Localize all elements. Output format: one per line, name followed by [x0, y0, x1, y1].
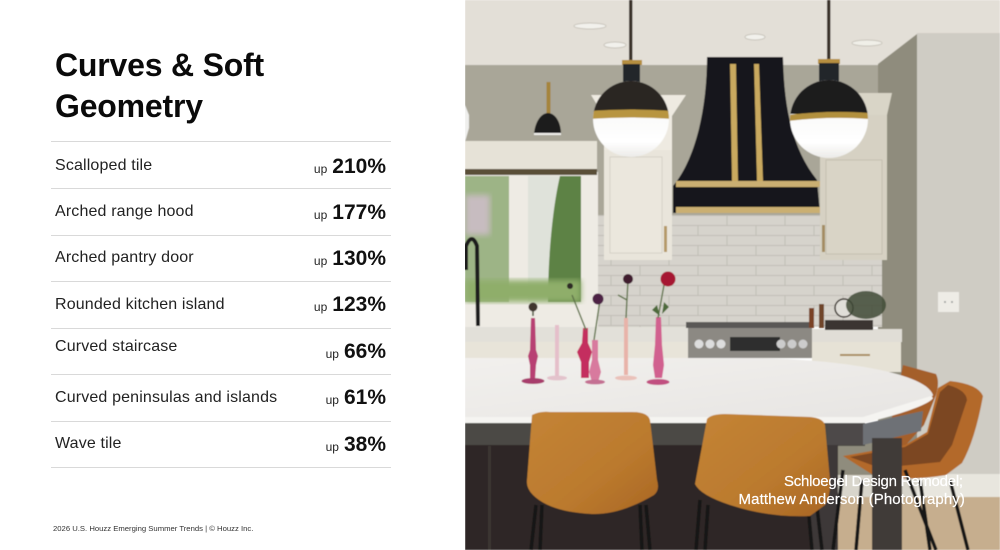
wall and skirting behind stools — [830, 430, 920, 498]
row: arched pantry door: Arched pantry door — [55, 249, 194, 266]
near right chair — [843, 381, 983, 478]
far chair — [885, 365, 938, 450]
title: Geometry — [55, 88, 203, 124]
photo credit: Schloegel Design Remodel; — [784, 473, 963, 490]
stool center — [695, 414, 830, 516]
row: scalloped tile: Scalloped tile — [55, 157, 152, 174]
side wall — [878, 34, 917, 480]
title — [55, 47, 264, 124]
pendant lamp left — [590, 0, 672, 157]
trend table — [51, 141, 391, 468]
row: wave tile: Wave tile — [55, 435, 122, 452]
row: arched range hood: Arched range hood — [55, 203, 194, 220]
left cabinet — [591, 95, 686, 260]
floor — [800, 497, 1000, 550]
title: Curves & Soft — [55, 47, 264, 83]
row: rounded kitchen island: Rounded kitchen island — [55, 296, 225, 313]
sconce — [534, 82, 561, 135]
photo: kitchen with curved island — [465, 0, 1000, 550]
value: arched range hood: up177% — [314, 201, 386, 224]
row: curved peninsulas and islands: Curved peninsulas and islands — [55, 389, 277, 406]
range — [686, 322, 812, 358]
right wall — [917, 33, 1000, 498]
rear counter and base cabinets — [465, 327, 902, 372]
countertop accessories — [809, 291, 886, 330]
panel: statistics — [0, 0, 465, 550]
value: scalloped tile: up210% — [314, 155, 386, 178]
right cabinet — [820, 93, 892, 260]
back wall — [465, 65, 885, 245]
island countertop — [465, 358, 933, 423]
range hood — [673, 57, 820, 213]
bud vases and flowers — [522, 272, 676, 385]
backsplash — [597, 215, 882, 327]
window valance — [465, 141, 597, 175]
left wall pendant edge — [465, 105, 469, 142]
stool left — [527, 412, 658, 514]
value: curved staircase: up66% — [326, 340, 386, 363]
window — [465, 172, 598, 332]
stool legs — [531, 470, 968, 550]
faucet — [466, 239, 478, 326]
value: rounded kitchen island: up123% — [314, 293, 386, 316]
ceiling — [465, 0, 1000, 66]
value: arched pantry door: up130% — [314, 247, 386, 270]
value: curved peninsulas and islands: up61% — [326, 386, 386, 409]
value: wave tile: up38% — [326, 433, 386, 456]
pendant lamp right — [788, 0, 870, 158]
photo credit: Matthew Anderson (Photography) — [739, 491, 965, 508]
island base — [465, 411, 923, 550]
island front edge highlight — [465, 396, 933, 423]
row: curved staircase: Curved staircase — [55, 338, 177, 355]
source footnote: 2026 U.S. Houzz Emerging Summer Trends | © Houzz Inc. — [53, 524, 253, 533]
